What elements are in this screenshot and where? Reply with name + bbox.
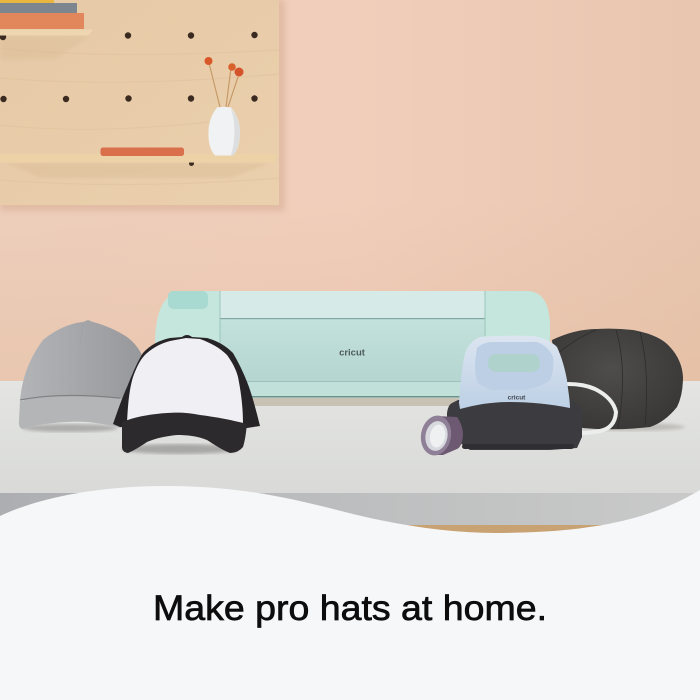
white wave panel xyxy=(0,486,700,700)
machine logo: cricut xyxy=(339,348,366,358)
top shelf xyxy=(0,30,93,36)
mini heat press xyxy=(459,336,570,409)
wood strip under table xyxy=(400,525,620,535)
orange tray xyxy=(100,148,184,156)
wall background xyxy=(0,0,700,390)
table edge xyxy=(0,493,700,525)
table top xyxy=(0,381,700,494)
long shelf xyxy=(0,154,277,162)
books on top shelf xyxy=(0,0,84,29)
vase with dried flowers xyxy=(204,57,244,156)
headline: Make pro hats at home. xyxy=(153,589,547,628)
cutting machine xyxy=(155,291,550,406)
press logo: cricut xyxy=(508,394,526,402)
press base tray xyxy=(447,400,582,450)
weeding tape roll xyxy=(418,413,463,458)
black and white trucker cap xyxy=(113,335,260,454)
grey cap xyxy=(19,320,142,432)
hat pressing form xyxy=(552,329,685,431)
power cord xyxy=(568,384,616,433)
pegboard shelf unit xyxy=(0,0,285,211)
